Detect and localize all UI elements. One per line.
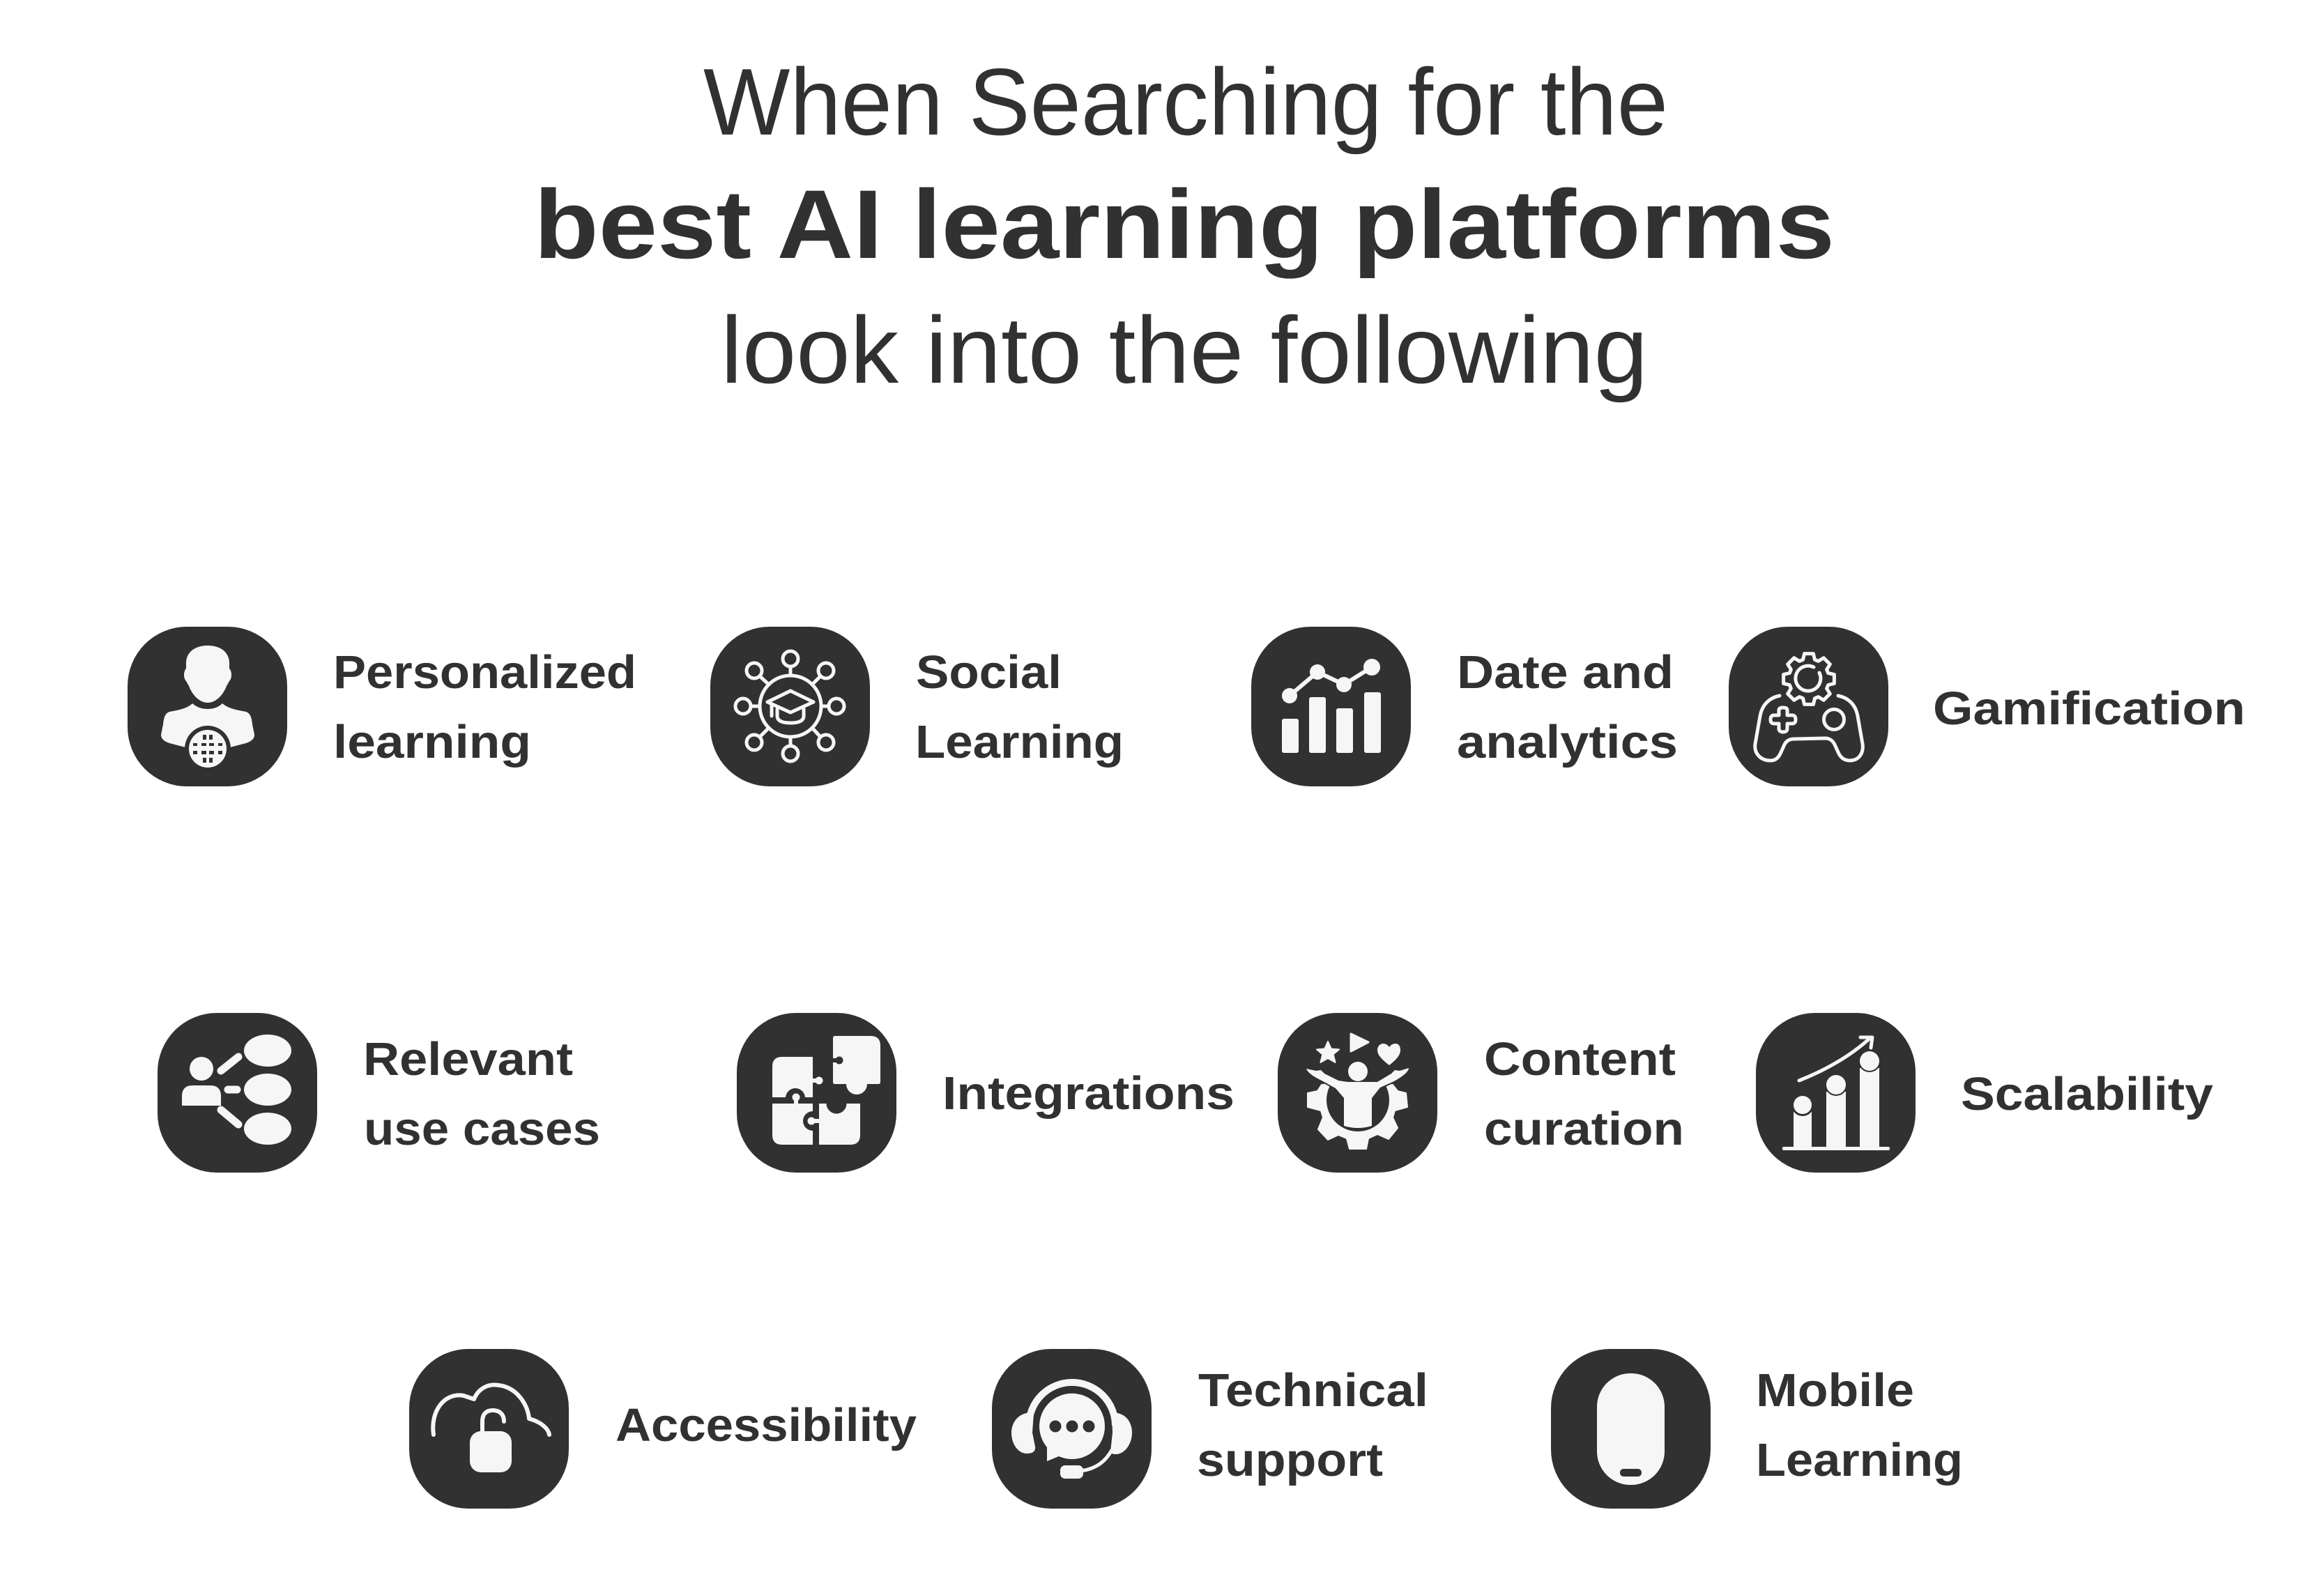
feature: integrations	[737, 1013, 1234, 1173]
label: content curation: Content	[1484, 1033, 1676, 1085]
label: technical support	[1197, 1364, 1428, 1486]
label: mobile learning: Mobile	[1756, 1364, 1914, 1417]
feature: mobile learning	[1551, 1349, 1963, 1509]
feature: personalized learning	[128, 627, 636, 786]
label: content curation: curation	[1484, 1103, 1684, 1155]
label: relevant use cases	[363, 1033, 600, 1155]
icon: person with globe	[128, 627, 287, 786]
icon: person connected to three options	[158, 1013, 317, 1173]
label: scalability: Scalability	[1961, 1068, 2213, 1120]
label: date and analytics: Date and	[1457, 646, 1674, 699]
feature: social learning	[710, 627, 1124, 786]
label: social learning	[915, 646, 1124, 768]
label: social learning: Learning	[915, 716, 1124, 768]
feature: content curation	[1278, 1013, 1684, 1173]
label: mobile learning	[1756, 1364, 1963, 1486]
feature: gamification	[1729, 627, 2245, 786]
label: date and analytics: analytics	[1457, 716, 1678, 768]
label: accessibility: Accessibility	[616, 1399, 917, 1451]
icon: person in gear with star, play and heart	[1278, 1013, 1437, 1173]
feature: scalability	[1756, 1013, 2213, 1173]
icon: network with graduation cap	[710, 627, 870, 786]
label: content curation	[1484, 1033, 1684, 1155]
label: social learning: Social	[916, 646, 1062, 699]
feature: relevant use cases	[158, 1013, 600, 1173]
label: gamification: Gamification	[1933, 682, 2245, 735]
title	[534, 49, 1835, 403]
icon: growth chart with arrow	[1756, 1013, 1916, 1173]
icon: bar chart with trend line	[1251, 627, 1411, 786]
feature: accessibility	[409, 1349, 917, 1509]
title: When Searching for the	[703, 49, 1668, 155]
label: relevant use cases: Relevant	[363, 1033, 573, 1085]
label: personalized learning	[333, 646, 636, 768]
label: personalized learning: Personalized	[333, 646, 636, 699]
icon: cloud with open padlock	[409, 1349, 569, 1509]
label: relevant use cases: use cases	[364, 1103, 600, 1155]
label: integrations: Integrations	[942, 1067, 1234, 1120]
icon: headset with chat bubble	[992, 1349, 1152, 1509]
label: personalized learning: learning	[333, 716, 531, 768]
title: best AI learning platforms	[534, 169, 1835, 279]
feature: date and analytics	[1251, 627, 1678, 786]
label: mobile learning: Learning	[1756, 1434, 1963, 1486]
title: look into the following	[721, 297, 1648, 403]
feature: technical support	[992, 1349, 1428, 1509]
label: technical support: Technical	[1198, 1364, 1428, 1417]
icon: game controller with gear	[1729, 627, 1888, 786]
icon: mobile phone	[1551, 1349, 1711, 1509]
icon: puzzle pieces	[737, 1013, 896, 1173]
label: date and analytics	[1457, 646, 1678, 768]
label: technical support: support	[1197, 1434, 1383, 1486]
